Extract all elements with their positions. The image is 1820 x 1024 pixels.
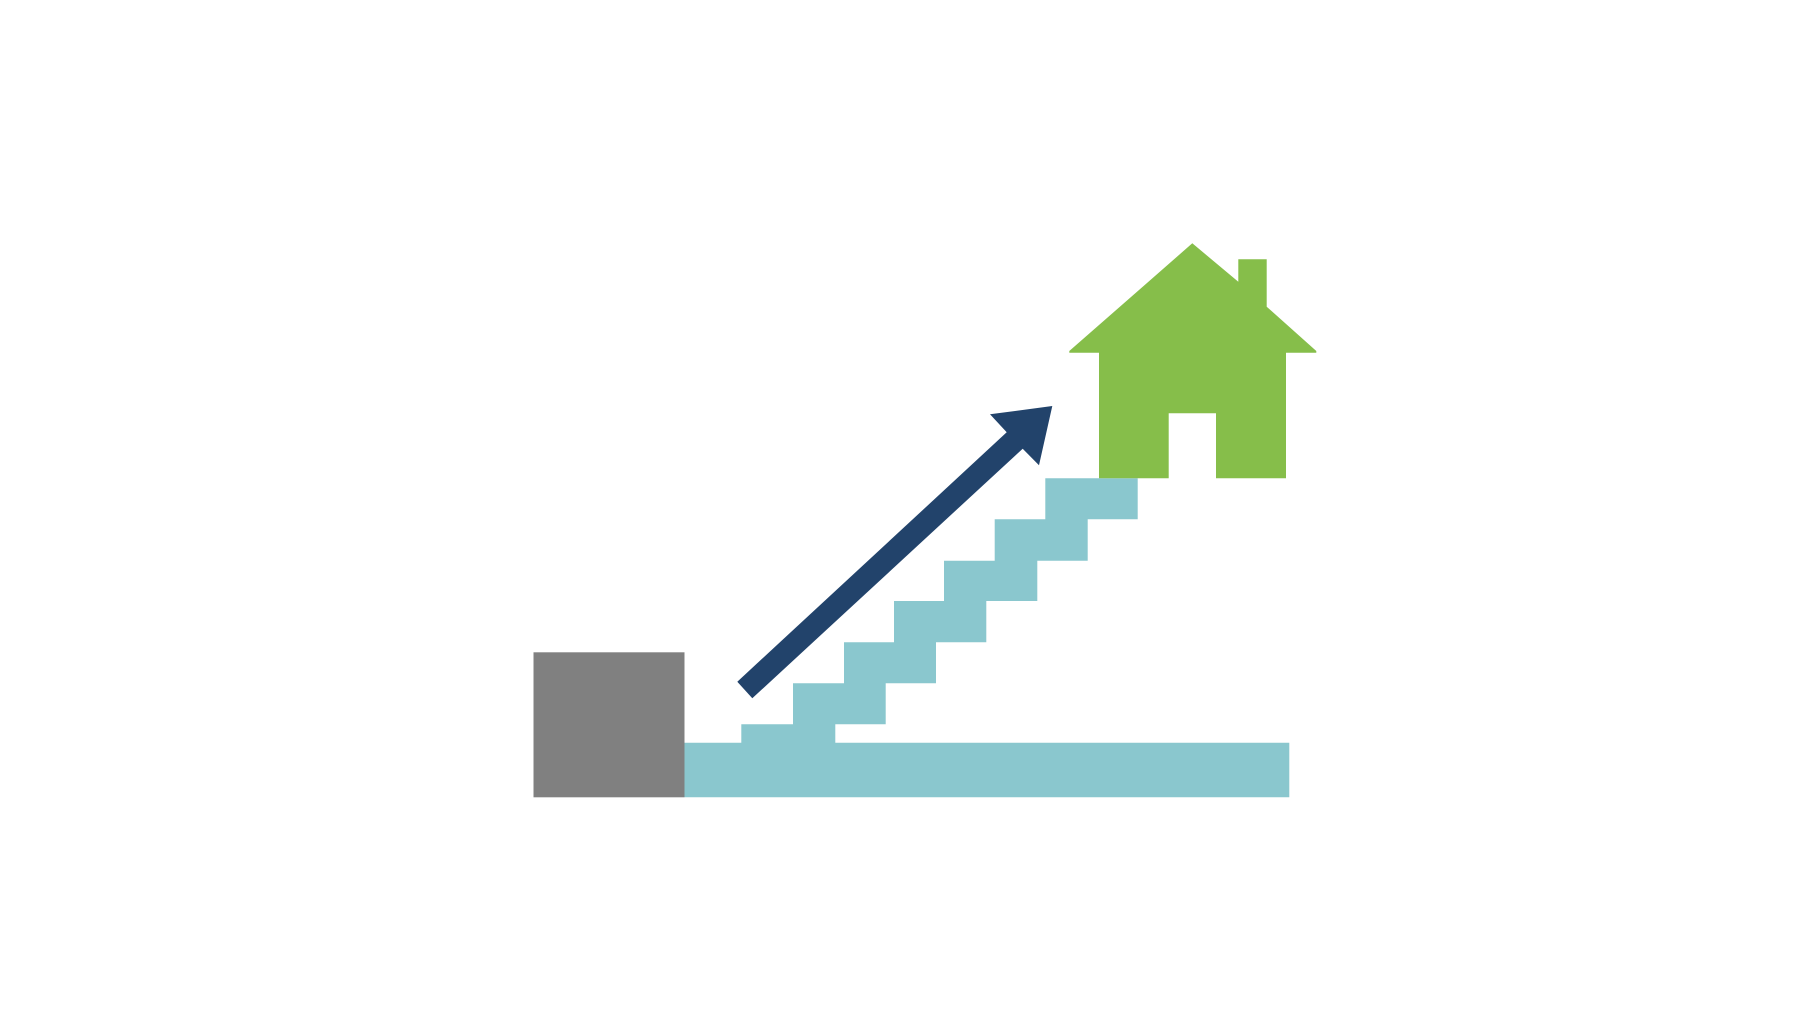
green house icon — [1069, 243, 1316, 478]
navy rising arrow — [737, 406, 1052, 698]
gray starting block — [534, 652, 684, 797]
teal staircase and base platform — [684, 478, 1289, 797]
